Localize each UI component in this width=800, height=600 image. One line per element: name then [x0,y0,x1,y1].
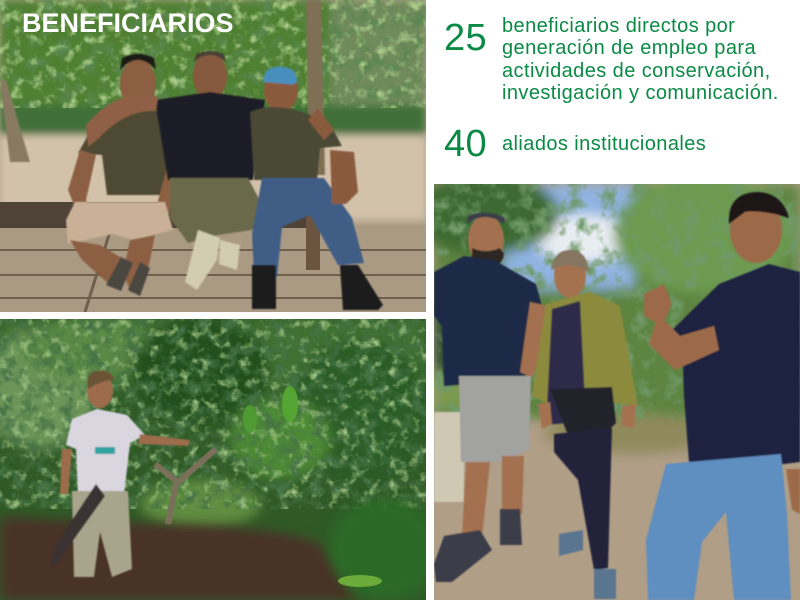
photo: three men seated on a wooden bench [0,0,426,312]
description: actividades de conservación, [502,60,771,82]
stat: 25 direct beneficiaries [444,15,779,104]
foliage texture [434,184,800,419]
bench [0,202,320,228]
description: beneficiarios directos por [502,15,735,37]
description: generación de empleo para [502,37,756,59]
man left [434,212,548,582]
ground [0,517,360,600]
tree branches [155,449,216,524]
stat: 40 institutional allies [444,123,706,165]
woman center [532,250,638,599]
tree trunk [306,0,325,175]
photo: woman standing in a green orchard [0,319,426,600]
description: investigación y comunicación. [502,82,779,104]
foliage texture [0,319,426,509]
leaves [282,386,298,422]
man right [644,192,800,600]
woman [50,371,190,577]
number 25: 25 [444,17,487,59]
man right [250,67,383,310]
deck [0,225,426,312]
photo: three people outdoors, man giving thumbs up [434,184,800,600]
description: aliados institucionales [502,133,706,155]
title: BENEFICIARIOS: BENEFICIARIOS [22,8,234,38]
description [502,15,779,104]
number 40: 40 [444,123,487,165]
man middle [86,51,265,290]
foliage texture [0,0,426,108]
man left [66,54,187,296]
